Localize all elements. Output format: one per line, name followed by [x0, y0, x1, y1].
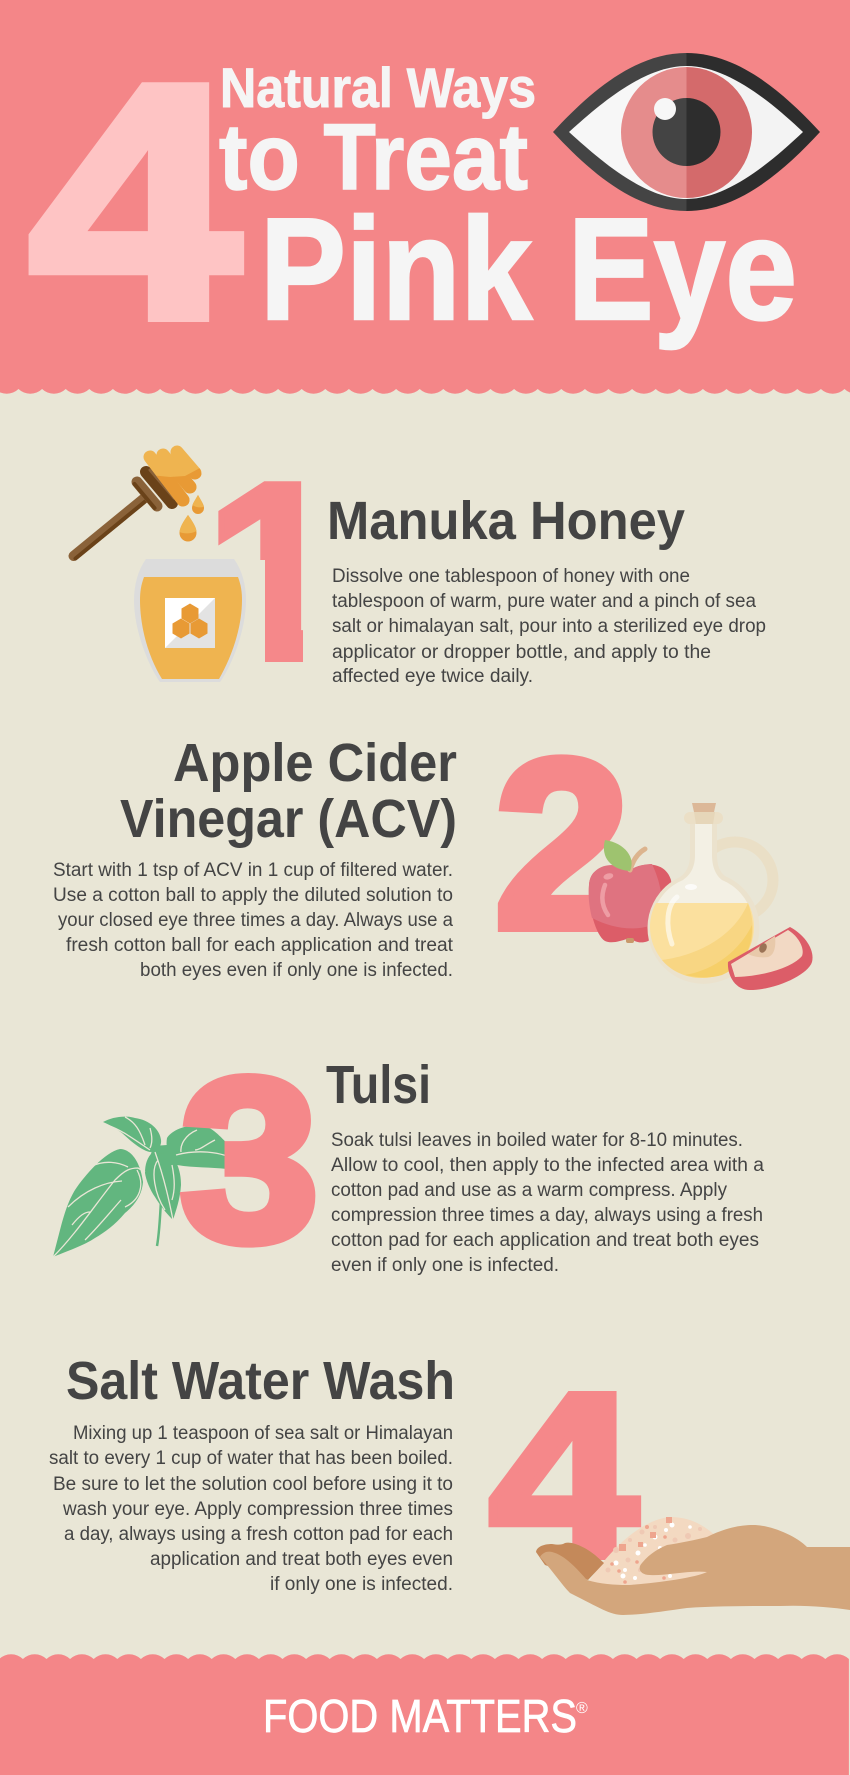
- body text: cotton pad and use as a warm compress. Apply: [331, 1180, 727, 1201]
- body text: application and treat both eyes even: [150, 1549, 453, 1570]
- section 4: Salt Water Wash: [49, 1344, 850, 1615]
- body text: a day, always using a fresh cotton pad for each: [64, 1524, 453, 1545]
- body text: [53, 860, 454, 981]
- body text: tablespoon of warm, pure water and a pinch of sea: [332, 591, 756, 612]
- icon: honey dipper: [74, 452, 195, 558]
- section 3: Tulsi: [53, 1031, 764, 1290]
- heading: Tulsi: [326, 1055, 431, 1115]
- body text: wash your eye. Apply compression three times: [62, 1499, 453, 1520]
- icon: tulsi leaves: [53, 1117, 260, 1257]
- panel: header: [0, 0, 850, 394]
- title: to Treat: [219, 104, 528, 209]
- panel: footer: [0, 1654, 849, 1775]
- heading: Apple Cider: [173, 733, 457, 793]
- body text: your closed eye three times a day. Always use a: [58, 910, 453, 931]
- icon: apple: [589, 840, 671, 943]
- body text: cotton pad for each application and treat both eyes: [331, 1230, 759, 1251]
- icon: vinegar jug: [648, 803, 773, 984]
- section 2: Apple Cider Vinegar: [53, 710, 813, 990]
- body text: if only one is infected.: [270, 1574, 453, 1595]
- heading: Vinegar (ACV): [120, 789, 457, 849]
- logo: Food Matters: FOOD MATTERS: [263, 1690, 577, 1742]
- body text: applicator or dropper bottle, and apply to the: [332, 642, 711, 663]
- numeral 4: 4: [489, 1344, 638, 1606]
- body text: even if only one is infected.: [331, 1255, 559, 1276]
- body text: Start with 1 tsp of ACV in 1 cup of filtered water.: [53, 860, 453, 881]
- heading: Manuka Honey: [327, 491, 685, 551]
- body text: [332, 566, 766, 687]
- icon: honey drops: [180, 495, 204, 542]
- body text: affected eye twice daily.: [332, 666, 533, 687]
- body text: compression three times a day, always using a fresh: [331, 1205, 763, 1226]
- body text: Be sure to let the solution cool before using it to: [53, 1474, 453, 1495]
- numeral 3: 3: [180, 1031, 319, 1290]
- body text: both eyes even if only one is infected.: [140, 960, 453, 981]
- body text: Mixing up 1 teaspoon of sea salt or Himalayan: [73, 1423, 453, 1444]
- body text: salt or himalayan salt, pour into a sterilized eye drop: [332, 616, 766, 637]
- title: Pink Eye: [260, 188, 797, 350]
- big numeral 4: 4: [28, 15, 243, 388]
- numeral 1: 1: [204, 429, 345, 713]
- numeral 2: 2: [494, 710, 630, 978]
- body text: fresh cotton ball for each application and treat: [66, 935, 454, 956]
- icon: apple slice: [728, 927, 813, 990]
- body text: [49, 1423, 453, 1595]
- icon: hand holding salt: [536, 1517, 850, 1615]
- icon: honey jar: [134, 559, 246, 682]
- logo: Food Matters: ®: [576, 1700, 588, 1717]
- body text: [331, 1130, 764, 1276]
- body text: Allow to cool, then apply to the infected area with a: [331, 1155, 764, 1176]
- heading: [120, 733, 457, 849]
- title: [219, 56, 797, 350]
- title: Natural Ways: [220, 56, 536, 119]
- body text: salt to every 1 cup of water that has been boiled.: [49, 1448, 453, 1469]
- icon: pink eye: [553, 53, 820, 211]
- heading: Salt Water Wash: [66, 1351, 455, 1411]
- body text: Soak tulsi leaves in boiled water for 8-10 minutes.: [331, 1130, 743, 1151]
- body text: Use a cotton ball to apply the diluted solution to: [53, 885, 453, 906]
- body text: Dissolve one tablespoon of honey with one: [332, 566, 690, 587]
- section 1: Manuka Honey: [68, 446, 766, 686]
